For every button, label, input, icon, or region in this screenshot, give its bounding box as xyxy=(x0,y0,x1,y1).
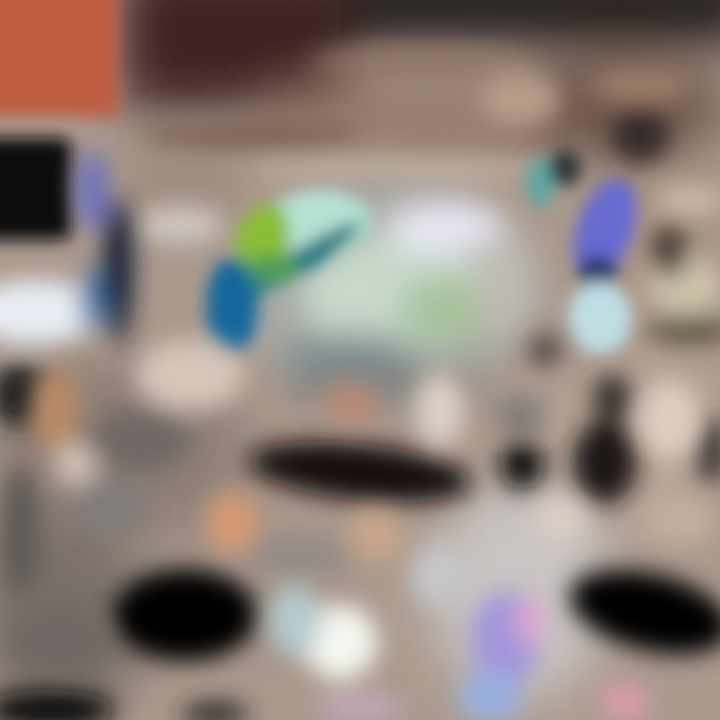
bottom pastel highlights xyxy=(269,543,651,720)
left blue-white shapes xyxy=(0,150,133,427)
globe xyxy=(206,180,535,406)
globe highlights: green and blue band xyxy=(206,190,372,353)
lower mid-tones xyxy=(0,339,716,674)
banding xyxy=(135,50,720,344)
dark blobs xyxy=(0,334,720,720)
left monitor: black square xyxy=(0,138,72,240)
right blue-purple shape xyxy=(526,150,649,354)
top-left orange block xyxy=(0,0,118,116)
globe body xyxy=(235,180,535,400)
